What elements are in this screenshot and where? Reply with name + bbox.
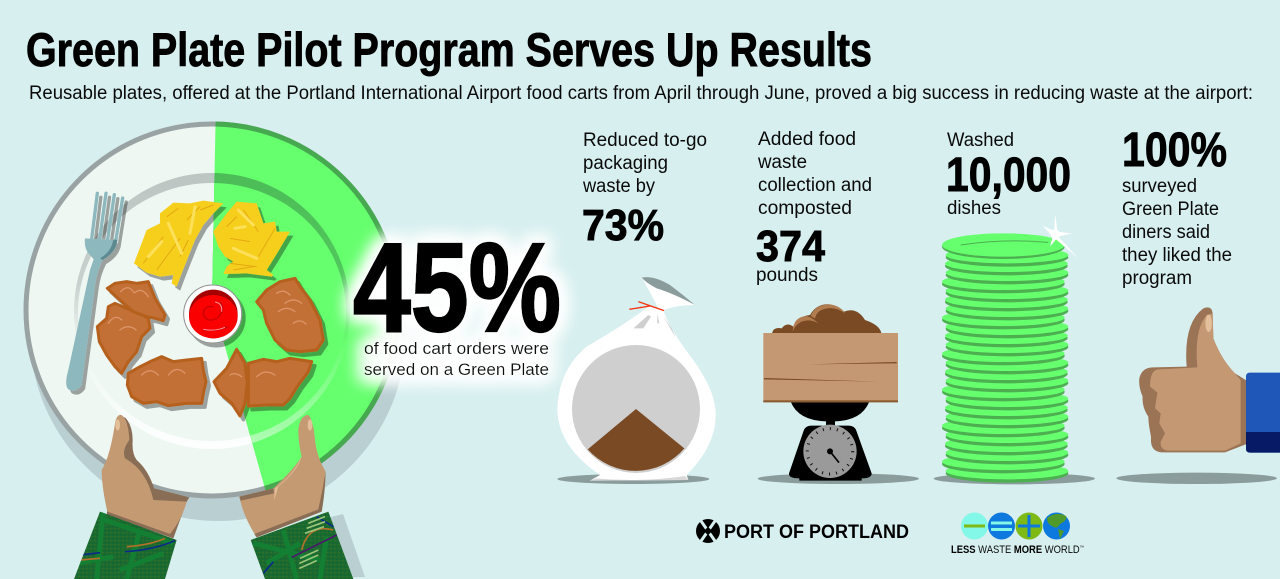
food in zoomed coordinates <box>66 193 355 579</box>
big statistic: 45 percent: of food cart orders were <box>364 340 549 358</box>
plate shadow <box>30 145 406 521</box>
stat: dishes washed: dishes <box>947 198 1001 219</box>
plus circle <box>1016 512 1042 540</box>
logo mark <box>696 519 720 543</box>
white plate <box>26 124 398 496</box>
stat: diners liked program: diners said <box>1122 222 1210 243</box>
stat: diners liked program: 100% <box>1122 124 1227 177</box>
stat: dishes washed: 10,000 <box>946 149 1071 202</box>
stat: diners liked program <box>1122 124 1232 289</box>
right hand <box>239 415 326 537</box>
icon: garbage bag <box>557 277 716 484</box>
stat: composted pounds: waste <box>757 152 807 173</box>
left hand <box>102 415 189 538</box>
stat: composted pounds: 374 <box>756 222 825 271</box>
logo: Less Waste More World <box>951 512 1084 556</box>
scale <box>789 402 872 481</box>
crate <box>763 333 898 402</box>
logo: Port of Portland: PORT OF PORTLAND <box>724 522 909 543</box>
green 45 percent wedge <box>212 122 388 490</box>
stat: packaging waste <box>582 130 707 250</box>
stat: dishes washed: Washed <box>947 130 1014 151</box>
stat: diners liked program: Green Plate <box>1122 199 1219 220</box>
globe <box>1043 512 1070 540</box>
right camouflage sleeve <box>248 510 355 579</box>
hand <box>1139 307 1248 452</box>
title: Green Plate Pilot Program Serves Up Results <box>26 23 872 76</box>
fried chicken pieces <box>97 278 323 416</box>
stat: diners liked program: surveyed <box>1122 176 1197 197</box>
left camouflage sleeve <box>70 510 180 579</box>
stat: composted pounds: Added food <box>758 129 856 150</box>
stat: composted pounds <box>756 129 872 286</box>
french fries <box>134 201 290 287</box>
fry highlights <box>148 207 257 258</box>
stat: packaging waste: Reduced to-go <box>583 130 707 151</box>
stat: composted pounds: collection and <box>758 175 872 196</box>
icon: stack of green plates <box>934 214 1095 484</box>
stat: diners liked program: they liked the <box>1122 245 1232 266</box>
fry shading <box>143 205 275 270</box>
minus circle <box>961 512 988 540</box>
plates <box>942 233 1068 483</box>
equals circle <box>988 512 1015 540</box>
cuff <box>1246 373 1280 453</box>
sparkle <box>1043 214 1078 258</box>
stat: packaging waste: waste by <box>582 176 655 197</box>
right sleeve shadow <box>285 514 365 579</box>
stat: packaging waste: 73% <box>582 201 664 250</box>
subtitle: Reusable plates, offered at the Portland International Airport food carts from April through June, proved a big success in reducing waste at the airport: <box>29 83 1253 104</box>
icon: compost crate on scale <box>758 304 919 484</box>
compost pile <box>772 304 881 333</box>
stat: diners liked program: program <box>1122 268 1192 289</box>
plate illustration with food and hands <box>26 124 406 579</box>
stat: composted pounds: pounds <box>756 265 818 286</box>
chicken highlights <box>108 288 306 377</box>
stat: packaging waste: packaging <box>583 153 668 174</box>
stat: dishes washed <box>946 130 1071 219</box>
ketchup cup <box>184 285 242 343</box>
big statistic: 45 percent: 45% <box>353 217 561 358</box>
logo: Less Waste More World: LESS WASTE MORE WORLD <box>951 544 1086 556</box>
fork <box>66 193 123 391</box>
big statistic: 45 percent: served on a Green Plate <box>364 361 549 379</box>
logo: Less Waste More World: ™ <box>1080 545 1084 551</box>
icon: thumbs up <box>1116 307 1280 484</box>
stat: composted pounds: composted <box>758 198 852 219</box>
